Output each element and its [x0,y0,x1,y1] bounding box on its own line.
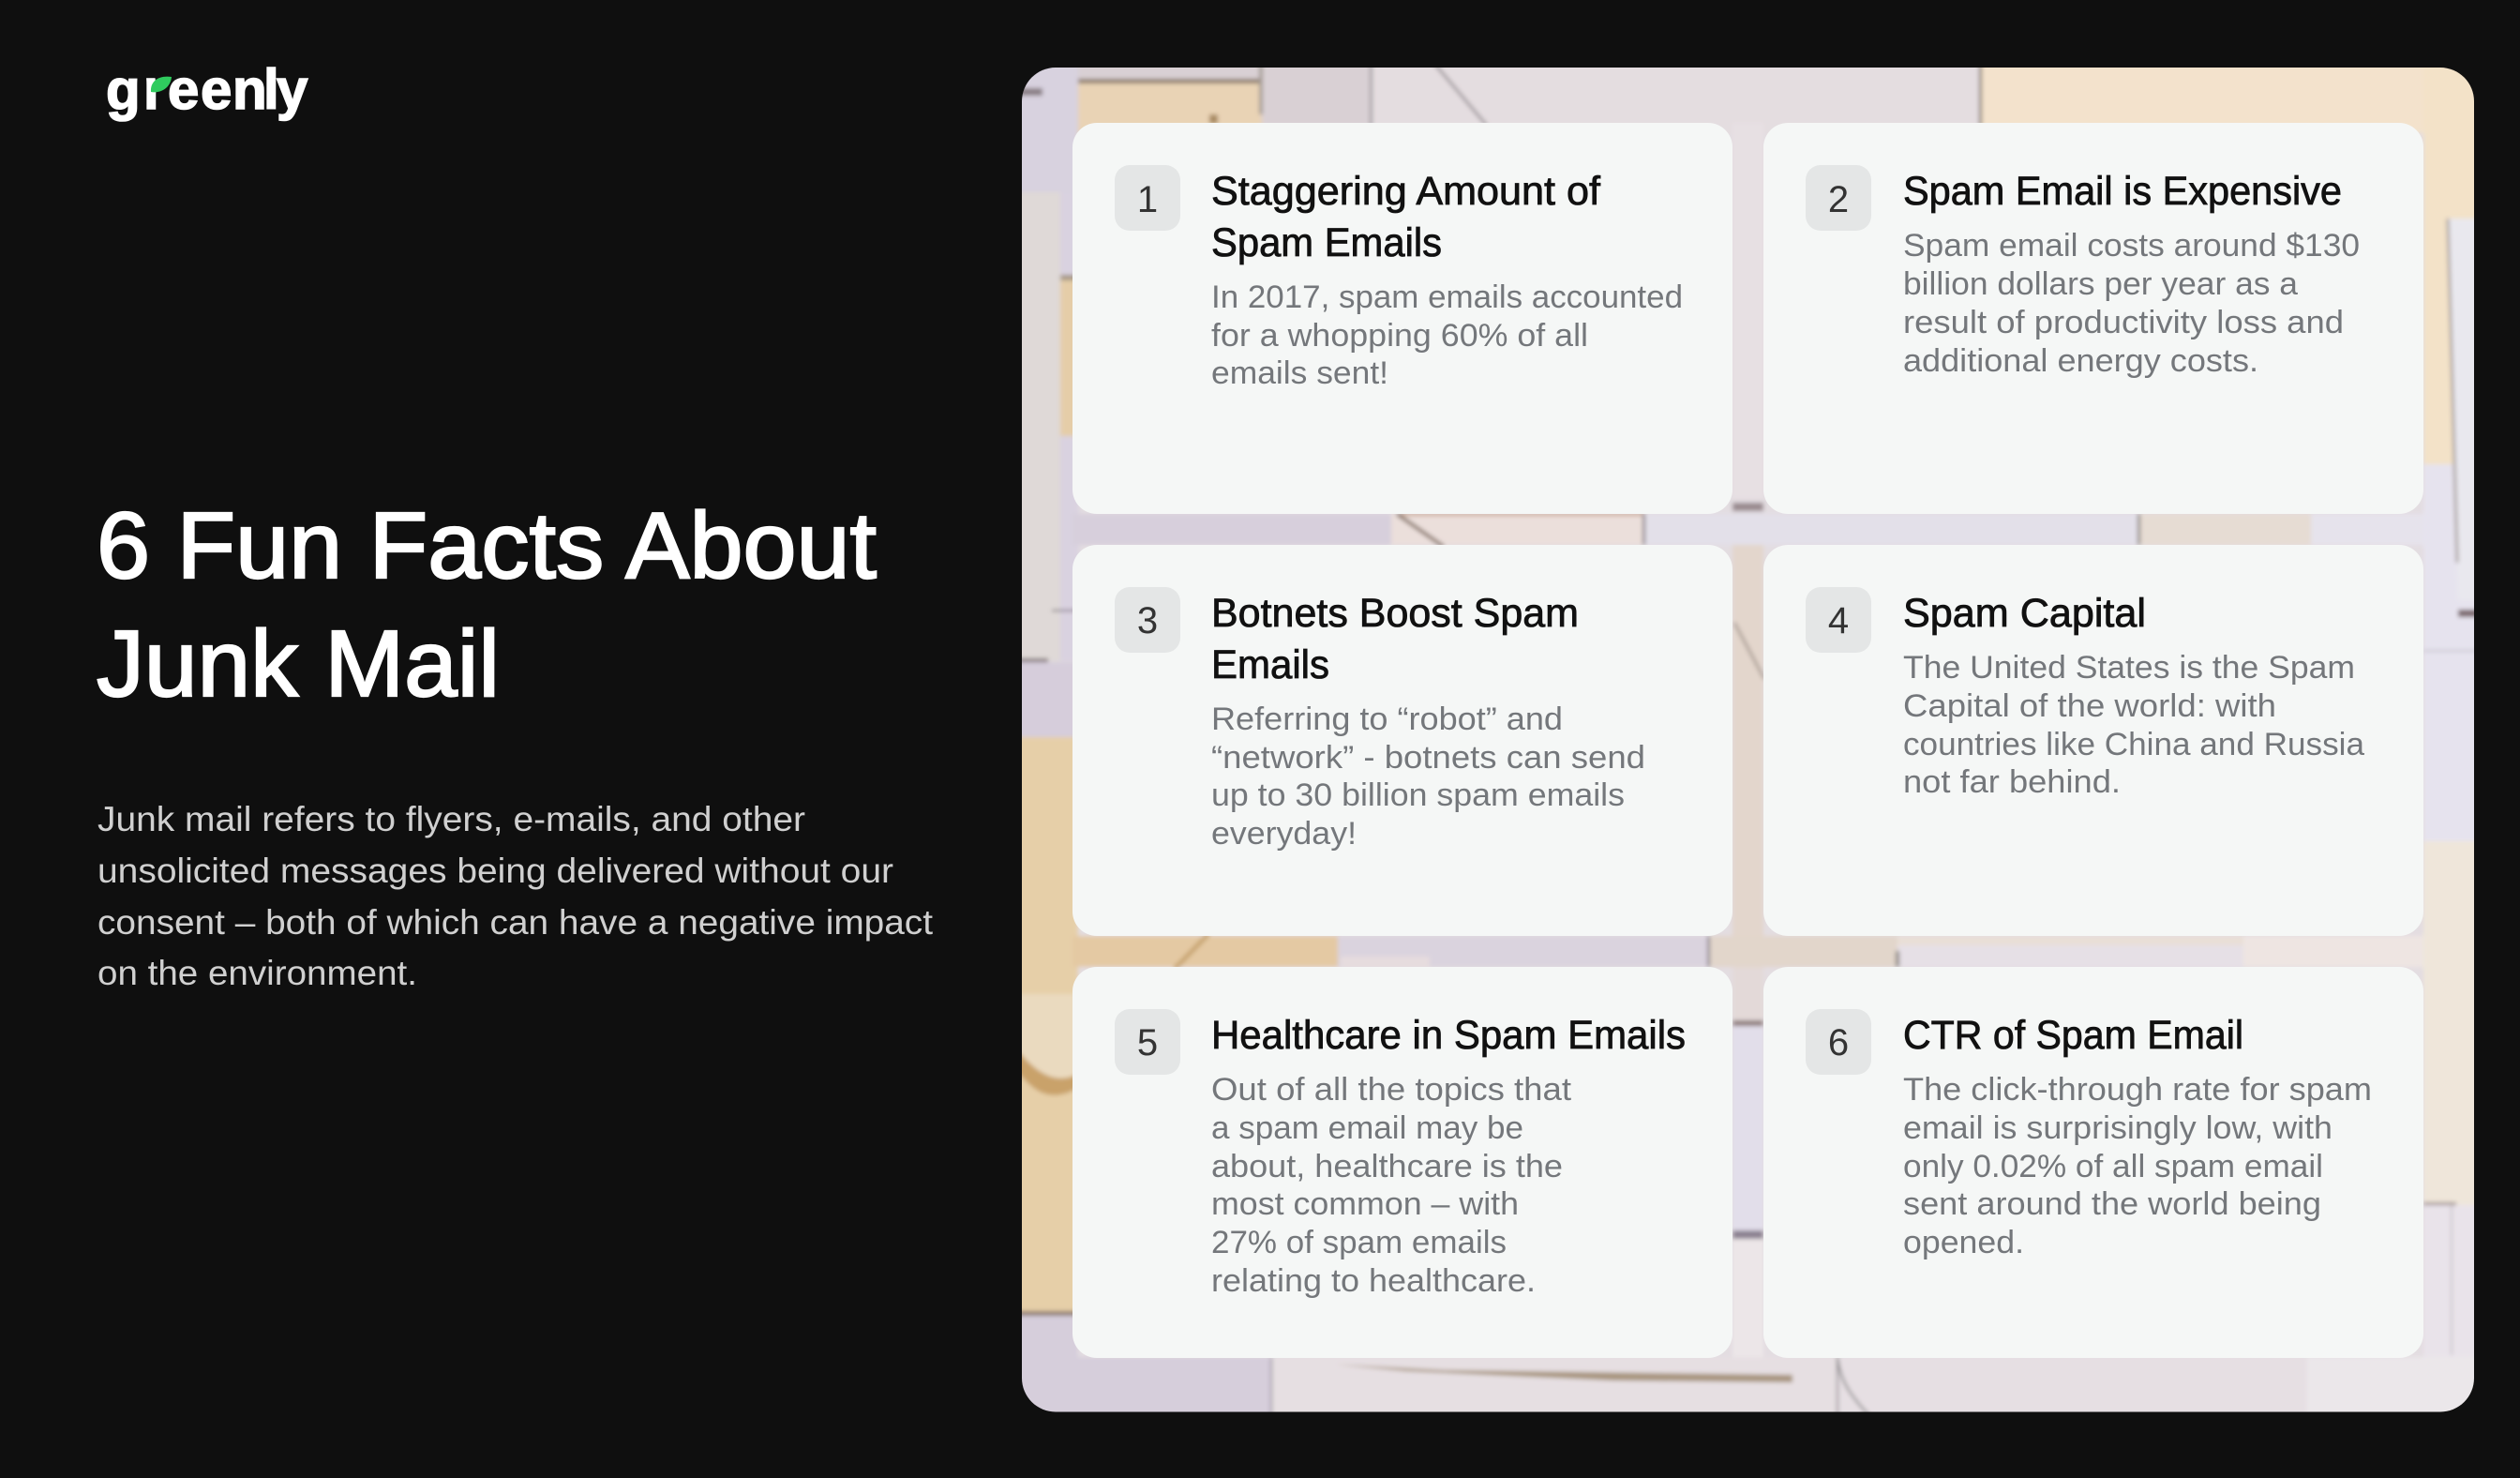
badge 5: 5 [1137,1022,1158,1063]
card 1 [1072,123,1732,514]
badge 4: 4 [1828,600,1849,641]
title 5: Healthcare in Spam Emails [1211,1013,1686,1058]
body 5: a spam email may be [1211,1110,1523,1146]
badge 3: 3 [1137,600,1158,641]
body 6: sent around the world being [1903,1186,2321,1222]
card 4 [1763,545,2423,936]
body 3 [1211,701,1645,852]
body 1: emails sent! [1211,355,1388,391]
title [97,493,877,716]
title 1: Staggering Amount of [1211,169,1601,214]
body 5: most common – with [1211,1186,1519,1222]
body 6: only 0.02% of all spam email [1903,1149,2323,1184]
body 3: everyday! [1211,816,1357,852]
body 5: 27% of spam emails [1211,1225,1507,1260]
intro paragraph: unsolicited messages being delivered without our [98,852,893,890]
body 2: billion dollars per year as a [1903,266,2298,302]
body 6: opened. [1903,1225,2024,1260]
badge 6 [1806,1009,1871,1075]
body 2: result of productivity loss and [1903,305,2344,340]
title 3: Emails [1211,642,1329,687]
body 4: The United States is the Spam [1903,650,2355,686]
intro paragraph: Junk mail refers to flyers, e-mails, and other [98,800,805,838]
body 1: for a whopping 60% of all [1211,318,1588,354]
badge 6: 6 [1828,1022,1849,1063]
title 4: Spam Capital [1903,591,2146,636]
title 2: Spam Email is Expensive [1903,169,2342,214]
icon: green leaf [151,77,172,92]
title 3: Botnets Boost Spam [1211,591,1579,636]
body 5: Out of all the topics that [1211,1072,1572,1108]
title: Junk Mail [97,611,500,716]
logo: greenly: greenly [106,58,308,121]
body 5: relating to healthcare. [1211,1263,1536,1299]
body 2: additional energy costs. [1903,343,2258,379]
body 4: Capital of the world: with [1903,688,2276,724]
title 3 [1211,591,1579,687]
card 2 [1763,123,2423,514]
body 3: up to 30 billion spam emails [1211,777,1625,813]
body 5: about, healthcare is the [1211,1149,1563,1184]
badge 5 [1115,1009,1180,1075]
body 3: Referring to “robot” and [1211,701,1563,737]
badge 4 [1806,587,1871,653]
body 1: In 2017, spam emails accounted [1211,279,1683,315]
title: 6 Fun Facts About [97,493,877,598]
body 3: “network” - botnets can send [1211,740,1645,776]
badge 2: 2 [1828,179,1849,220]
badge 2 [1806,165,1871,231]
title 1: Spam Emails [1211,220,1442,265]
body 2: Spam email costs around $130 [1903,228,2360,264]
body 4: countries like China and Russia [1903,727,2364,762]
card 6 [1763,967,2423,1358]
body 6: The click-through rate for spam [1903,1072,2372,1108]
body 6: email is surprisingly low, with [1903,1110,2332,1146]
title 6: CTR of Spam Email [1903,1013,2243,1058]
card 5 [1072,967,1732,1358]
title 1 [1211,169,1601,265]
panel: envelope photo background [994,39,2503,1447]
badge 3 [1115,587,1180,653]
body 5 [1211,1072,1572,1299]
intro paragraph: consent – both of which can have a negative impact [98,903,934,942]
badge 1: 1 [1137,179,1158,220]
body 1 [1211,279,1683,391]
intro paragraph: on the environment. [98,954,417,992]
card 3 [1072,545,1732,936]
badge 1 [1115,165,1180,231]
intro paragraph [98,800,934,992]
body 4: not far behind. [1903,764,2121,800]
body 6 [1903,1072,2372,1260]
body 4 [1903,650,2364,800]
body 2 [1903,228,2360,379]
